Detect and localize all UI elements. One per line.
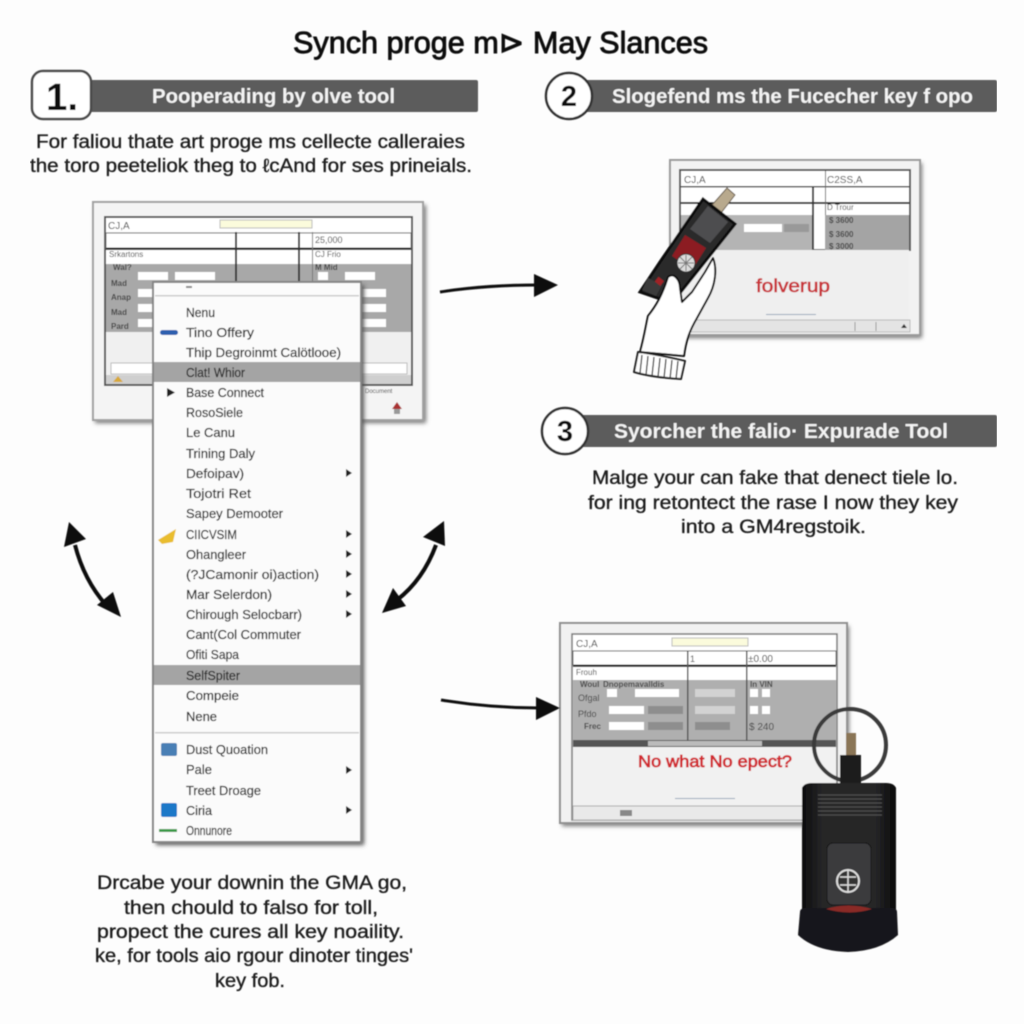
context menu: Nene bbox=[186, 709, 217, 724]
software window 3: CJ,A bbox=[576, 639, 598, 650]
step 3 description: Malge your can fake that denect tiele lo. bbox=[592, 468, 958, 489]
step 2 header: Slogefend ms the Fucecher key f opo bbox=[612, 86, 973, 108]
software window 1: Srkartons bbox=[109, 250, 143, 259]
software window 3: Dnopemavalldis bbox=[603, 680, 665, 689]
step 3 header bbox=[542, 408, 997, 454]
software window 1: Pard bbox=[111, 322, 129, 331]
context menu: Chirough Selocbarr) bbox=[186, 607, 302, 622]
software window 1: M Mid bbox=[315, 263, 338, 272]
software window 3: 1 bbox=[690, 654, 695, 664]
software window 1 bbox=[93, 202, 426, 423]
software window 3: Pfdo bbox=[578, 709, 597, 719]
software window 1: 25,000 bbox=[315, 235, 343, 245]
software window 3: No what No epect? bbox=[638, 752, 792, 771]
context menu: CIICVSIM bbox=[186, 527, 237, 542]
context menu: Ciria bbox=[186, 803, 213, 818]
context menu: Cant(Col Commuter bbox=[186, 627, 302, 642]
step 3 header: 3 bbox=[557, 416, 573, 448]
step 1 description: For faliou thate art proge ms cellecte calleraies bbox=[36, 132, 465, 153]
software window 1: CJ,A bbox=[108, 221, 130, 232]
step 2 header bbox=[546, 73, 997, 119]
context menu: Mar Selerdon) bbox=[186, 587, 272, 602]
context menu: Ofiti Sapa bbox=[186, 647, 240, 662]
context menu: Tojotri Ret bbox=[186, 486, 251, 501]
context menu: Thip Degroinmt Calötlooe) bbox=[186, 345, 341, 360]
software window 1: Anap bbox=[111, 293, 131, 302]
bottom description bbox=[95, 873, 413, 992]
software window 2: $ 3600 bbox=[829, 216, 854, 225]
bottom description: ke, for tools aio rgour dinoter tinges' bbox=[95, 946, 413, 967]
software window 1: Document bbox=[365, 389, 393, 395]
context menu: Onnunore bbox=[186, 823, 232, 838]
arrow: step 1 to step 2 bbox=[440, 274, 558, 297]
step 2 header: 2 bbox=[561, 81, 577, 113]
software window 3: Frec bbox=[584, 722, 601, 731]
software window 3: In VIN bbox=[750, 680, 773, 689]
software window 1: CJ Frio bbox=[315, 250, 341, 259]
software window 2: $ 3000 bbox=[829, 242, 854, 251]
step 1 header: Pooperading by olve tool bbox=[152, 86, 395, 108]
software window 2 bbox=[670, 160, 922, 338]
context menu: Base Connect bbox=[186, 385, 264, 400]
software window 2: CJ,A bbox=[684, 175, 706, 186]
step 3 description: for ing retontect the rase I now they key bbox=[588, 493, 959, 514]
title: Synch proge m⊳ May Slances bbox=[293, 25, 708, 60]
context menu bbox=[153, 282, 364, 845]
context menu: Clat! Whior bbox=[186, 365, 246, 380]
key fob bbox=[798, 709, 898, 952]
software window 3: Ofgal bbox=[578, 693, 600, 703]
context menu: Le Canu bbox=[186, 425, 235, 440]
double arrow: left bbox=[64, 522, 121, 617]
context menu: Ohangleer bbox=[186, 547, 247, 562]
software window 1: Mad bbox=[111, 308, 127, 317]
software window 2: D Trour bbox=[827, 203, 854, 212]
step 1 description bbox=[30, 132, 472, 177]
context menu: (?JCamonir oi)action) bbox=[186, 567, 319, 582]
context menu: Sapey Demooter bbox=[186, 506, 284, 521]
software window 3: $ 240 bbox=[749, 722, 774, 733]
step 1 header: 1. bbox=[46, 77, 78, 119]
bottom description: Drcabe your downin the GMA go, bbox=[97, 873, 407, 894]
context menu: Pale bbox=[186, 762, 212, 777]
context menu: Trining Daly bbox=[186, 446, 255, 461]
software window 1: Mad bbox=[111, 279, 127, 288]
step 3 description: into a GM4regstoik. bbox=[681, 517, 866, 538]
context menu: Defoipav) bbox=[186, 466, 244, 481]
double arrow: right bbox=[382, 521, 445, 613]
context menu: Tino Offery bbox=[186, 325, 255, 340]
context menu: RosoSiele bbox=[186, 405, 243, 420]
software window 3: Woul bbox=[580, 680, 599, 689]
step 1 description: the toro peeteliok theg to ℓcAnd for ses prineials. bbox=[30, 156, 472, 177]
software window 2: $ 3600 bbox=[829, 230, 854, 239]
bottom description: key fob. bbox=[215, 971, 285, 992]
software window 3 bbox=[560, 623, 849, 826]
context menu: Treet Droage bbox=[186, 783, 261, 798]
context menu: Nenu bbox=[186, 305, 215, 320]
step 3 description bbox=[588, 468, 959, 538]
hand holding programmer tool bbox=[634, 188, 735, 379]
software window 2: folverup bbox=[756, 276, 830, 296]
arrow: step 3 to key fob screen bbox=[441, 697, 560, 720]
bottom description: propect the cures all key noaility. bbox=[97, 922, 404, 943]
software window 2: C2SS,A bbox=[827, 175, 863, 186]
context menu: Compeie bbox=[186, 688, 239, 703]
software window 3: Frouh bbox=[576, 668, 597, 677]
software window 1: Wal? bbox=[113, 263, 132, 272]
context menu: SelfSpiter bbox=[186, 668, 241, 683]
context menu: Dust Quoation bbox=[186, 742, 268, 757]
bottom description: then chould to falso for toll, bbox=[124, 898, 378, 919]
step 3 header: Syorcher the falio· Expurade Tool bbox=[614, 421, 948, 443]
step 1 header bbox=[32, 71, 478, 119]
software window 3: ±0.00 bbox=[748, 654, 773, 665]
